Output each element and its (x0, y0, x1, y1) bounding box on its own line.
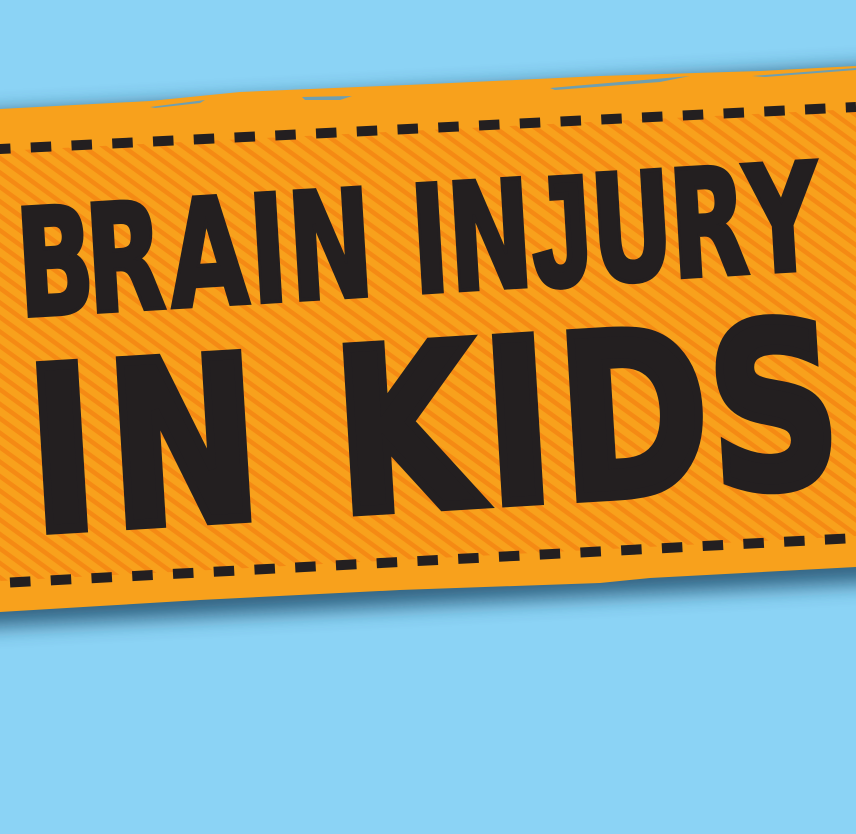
title line 1: J (527, 145, 595, 319)
title line 1 (12, 131, 826, 353)
infographic scene (0, 54, 856, 640)
title line 2: IN KIDS (21, 275, 847, 585)
diagonal stripes (0, 110, 856, 581)
scuff marks (150, 68, 856, 108)
bottom dashed line (10, 538, 856, 582)
top dashed line (0, 107, 856, 150)
band shadow (0, 66, 856, 628)
title line 1: IN (406, 149, 538, 329)
title line 1: URY (586, 132, 826, 319)
orange banner (0, 66, 856, 612)
title line 1: BRAIN (12, 158, 391, 353)
